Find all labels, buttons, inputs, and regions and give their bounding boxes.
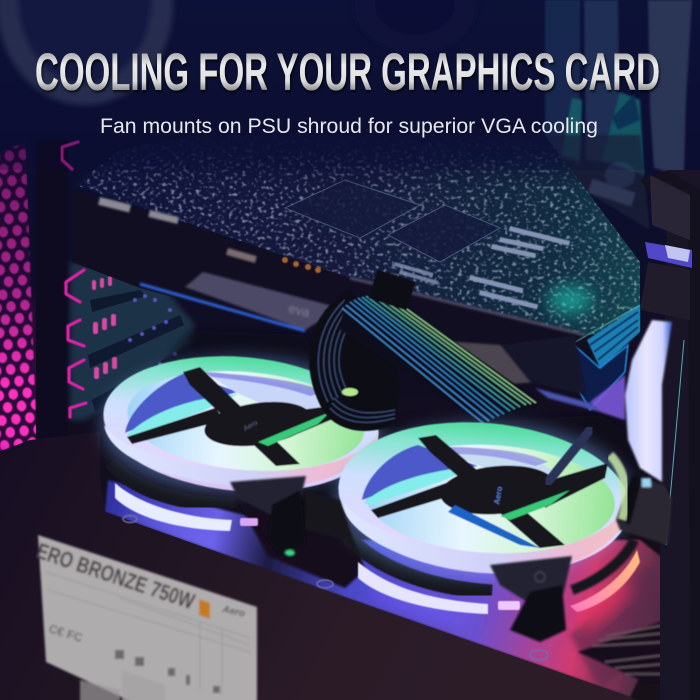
fan 1	[98, 345, 384, 503]
fan 2 teal streak	[364, 466, 478, 505]
fan 1 back blade	[205, 372, 330, 420]
fan 1 mounting clamp	[230, 476, 306, 556]
card metal bracket and back plate	[430, 335, 625, 420]
fan 2 back blade	[440, 447, 552, 485]
blue heatsink fins	[568, 305, 640, 410]
fan 1 hub	[202, 396, 314, 452]
Aero logo: Aero	[220, 604, 246, 620]
fan 1 strut A	[127, 408, 225, 444]
pink glow beneath panel	[0, 450, 10, 620]
fan 2 lower black frame	[342, 530, 492, 592]
right fan ring edge	[610, 455, 626, 520]
side fan light strip	[625, 320, 672, 482]
upper-left cooler fan arc	[0, 0, 173, 105]
upper cooler circle	[353, 0, 477, 53]
power cable ribbon	[340, 270, 540, 424]
memory modules at top right	[545, 0, 692, 176]
upper board components	[516, 135, 650, 230]
shroud screws	[123, 516, 548, 660]
clamp between fans	[305, 490, 360, 560]
pink slot hooks	[62, 142, 86, 417]
fan 2: Aero	[492, 486, 504, 505]
fan 1 green edge	[258, 412, 330, 446]
graphics card shroud underside	[72, 188, 590, 395]
bottom right vent	[578, 620, 665, 682]
fan 1 strut B	[183, 367, 300, 466]
PSU shroud top plate	[105, 480, 665, 697]
fan 1 ring lower tint	[104, 425, 379, 487]
silver card plate with evga mark	[140, 272, 340, 331]
dark area behind fans	[100, 330, 640, 540]
fan 2 ring lower tint	[340, 498, 630, 573]
top darkening overlay	[0, 0, 700, 170]
fan 1 teal streak	[126, 394, 238, 437]
honeycomb side panel	[0, 143, 37, 453]
fan 1 lower ring light	[115, 483, 258, 531]
fan 2 opening	[362, 439, 618, 559]
fan 2 mounting clamp	[490, 540, 634, 642]
cable bundle loop	[309, 290, 400, 431]
fan 2 upper blade	[362, 445, 478, 500]
side fan clamp	[616, 475, 672, 545]
subtitle: Fan mounts on PSU shroud for superior VGA cooling	[100, 115, 598, 138]
small fan cable	[548, 430, 590, 482]
PSU specification label	[33, 535, 257, 700]
fan 1 opening	[123, 362, 369, 480]
fan 2 strut B	[418, 435, 565, 548]
expansion slots	[70, 262, 195, 420]
fan 2 strut C	[545, 463, 608, 508]
fan 2 lower ring light	[358, 550, 640, 614]
fan 1 glow	[101, 357, 381, 493]
fan 1 strut C	[290, 405, 340, 437]
fan 1 lower black frame	[110, 462, 235, 505]
PSU model name: ERO BRONZE 750W	[33, 538, 198, 614]
fan 1: Aero	[243, 420, 259, 433]
fan 2 strut A	[371, 478, 470, 518]
fan 1 outer ring	[98, 345, 384, 503]
right frame column	[640, 170, 700, 700]
graphics card PCB	[70, 130, 650, 340]
silver card plate with evga mark: eva	[287, 300, 312, 320]
fan 2 glow	[334, 422, 634, 578]
bronze badge	[199, 599, 210, 619]
fan 2 outer ring	[332, 411, 636, 585]
dark vertical frame	[36, 140, 68, 450]
fan 2 green edge	[500, 490, 570, 520]
fan 1 upper blade	[125, 373, 238, 433]
PSU specification label: C€ FC	[47, 621, 85, 645]
PSU body front	[0, 432, 640, 700]
fan 2	[332, 411, 636, 585]
fan 2 hub	[438, 461, 558, 519]
